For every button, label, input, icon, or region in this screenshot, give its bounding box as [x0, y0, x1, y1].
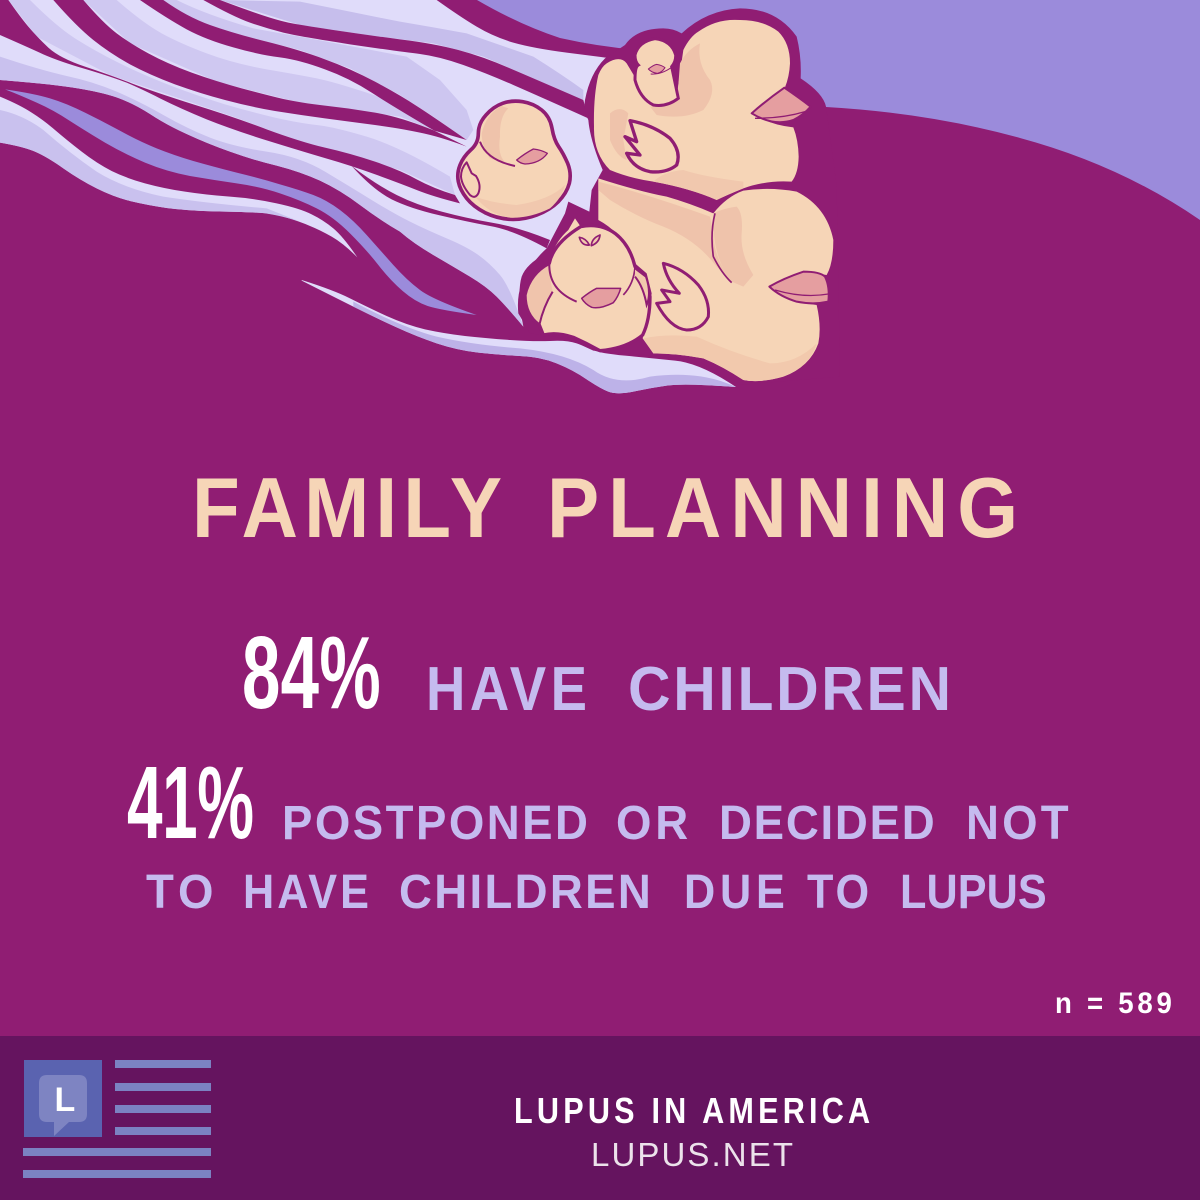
footer title: LUPUS IN AMERICA	[514, 1092, 870, 1132]
left duck	[458, 101, 570, 219]
small duck on back	[635, 39, 678, 105]
statistic: 84% have children: 84%	[242, 615, 381, 730]
large lower duck	[598, 178, 833, 381]
sky	[477, 0, 1200, 220]
large upper duck	[594, 20, 811, 200]
statistic: 41% postponed or decided not to have children: DECIDED	[719, 796, 935, 849]
statistic: 41% postponed or decided not to have children: TO	[146, 865, 213, 918]
rubber ducks illustration	[458, 8, 840, 385]
lower stream	[0, 97, 357, 257]
front duck	[525, 218, 650, 351]
statistic: 41% postponed or decided not to have children: NOT	[966, 796, 1069, 849]
statistic: 41% postponed or decided not to have children: LUPUS	[900, 865, 1047, 919]
bottom stream	[302, 280, 736, 393]
statistic: 41% postponed or decided not to have children: POSTPONED	[282, 796, 588, 849]
statistic: 41% postponed or decided not to have children: 41%	[127, 745, 254, 861]
logo: flag with speech bubble: L	[54, 1081, 75, 1119]
statistic: 84% have children	[242, 615, 951, 730]
statistic: 84% have children: HAVE	[426, 655, 587, 724]
statistic: 84% have children: CHILDREN	[628, 654, 951, 723]
flowing water streams	[0, 0, 736, 393]
footer website: LUPUS.NET	[591, 1136, 793, 1173]
statistic: 41% postponed or decided not to have children: TO	[807, 865, 869, 919]
title: PLANNING	[547, 461, 1018, 556]
statistic: 41% postponed or decided not to have children: HAVE	[243, 865, 369, 919]
title	[192, 461, 1018, 556]
footer band	[0, 1036, 1200, 1200]
duck outline halo	[518, 8, 840, 385]
sample size: n = 589	[1055, 987, 1172, 1020]
violet stream	[5, 89, 477, 315]
logo: flag with speech bubble	[23, 1060, 211, 1178]
statistic: 41% postponed or decided not to have children: DUE	[684, 865, 785, 919]
statistic: 41% postponed or decided not to have children	[127, 745, 1069, 919]
title: FAMILY	[192, 461, 502, 556]
statistic: 41% postponed or decided not to have children: OR	[616, 796, 688, 849]
upper stream mass	[0, 0, 633, 327]
statistic: 41% postponed or decided not to have children: CHILDREN	[399, 865, 651, 918]
